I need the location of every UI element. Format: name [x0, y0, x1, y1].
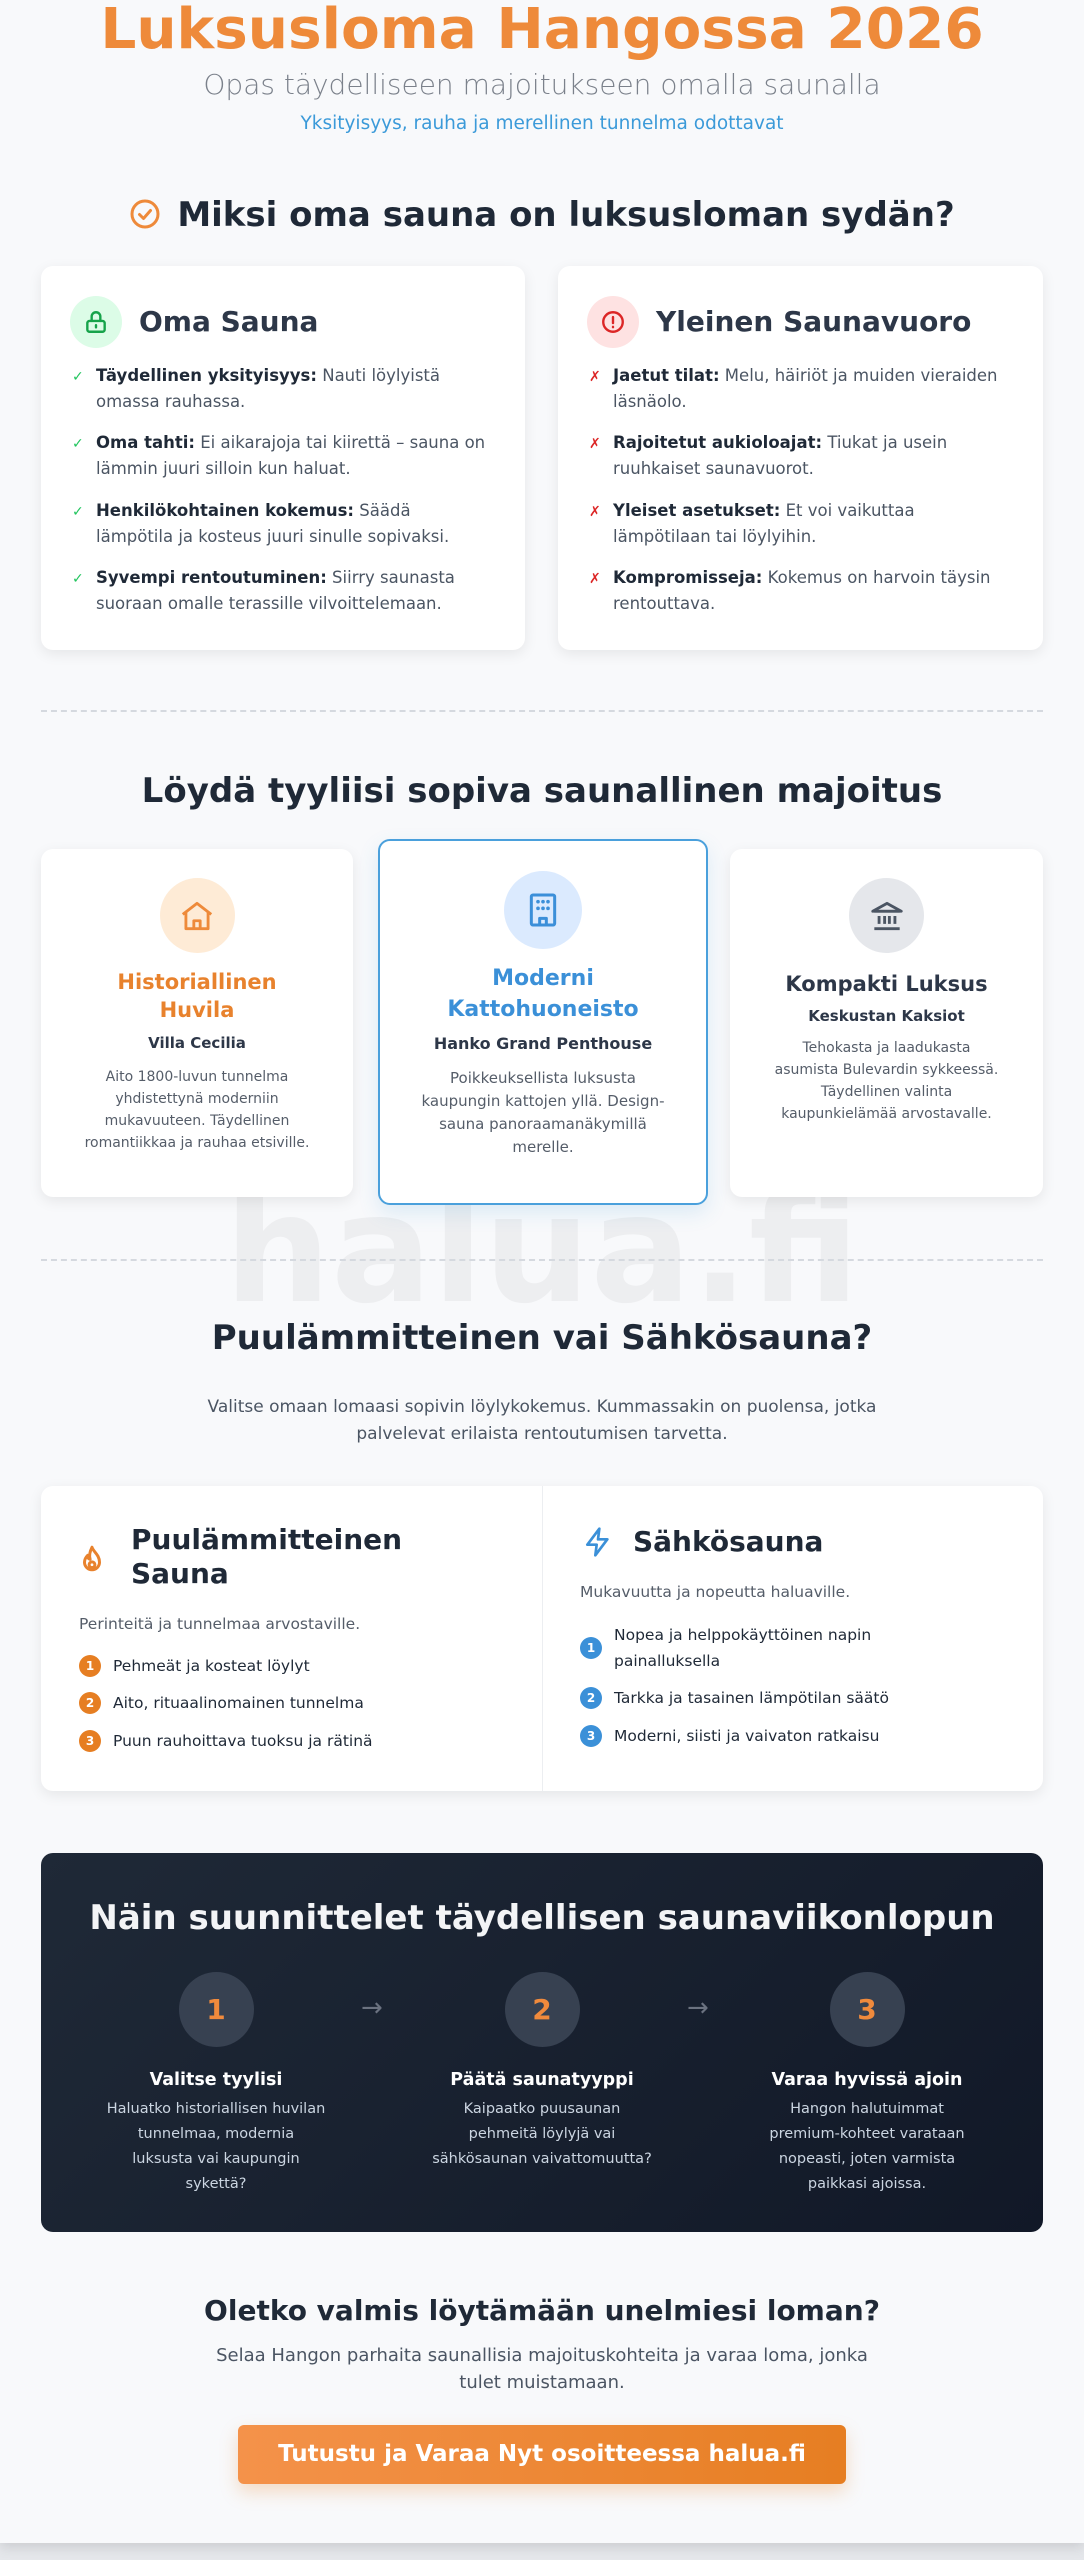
- column: wood sauna: Puun rauhoittava tuoksu ja rätinä: [113, 1732, 373, 1750]
- card text: Villa Cecilia: [148, 1034, 246, 1052]
- item list: Kompromisseja: Kokemus on harvoin täysin: [613, 568, 990, 587]
- item list: ruuhkaiset saunavuorot.: [613, 459, 814, 478]
- step 1: [107, 1972, 325, 2192]
- item list: Yleiset asetukset: Et voi vaikuttaa: [613, 501, 915, 520]
- step 1: 1: [206, 1993, 226, 2026]
- card text: mukavuuteen. Täydellinen: [105, 1113, 289, 1129]
- step 3: 3: [857, 1993, 877, 2026]
- CTA button: Tutustu ja Varaa Nyt osoitteessa halua.fi: [278, 2441, 806, 2467]
- icon: lightning: [586, 1527, 609, 1557]
- arrow: →: [361, 1993, 383, 2023]
- item list: [589, 366, 998, 613]
- column: electric sauna: Sähkösauna: [633, 1525, 823, 1558]
- card text: yhdistettynä moderniin: [115, 1091, 279, 1107]
- step 3: Hangon halutuimmat: [790, 2101, 944, 2117]
- icon: house: [160, 878, 234, 953]
- card text: Keskustan Kaksiot: [808, 1007, 965, 1025]
- step 2: 2: [532, 1993, 552, 2026]
- column: electric sauna: Nopea ja helppokäyttöinen napin: [614, 1626, 871, 1644]
- item list: lämpötila ja kosteus juuri sinulle sopivaksi.: [96, 527, 449, 546]
- item list: lämpötilaan tai löylyihin.: [613, 527, 816, 546]
- arrow: →: [687, 1993, 709, 2023]
- tagline: Yksityisyys, rauha ja merellinen tunnelma odottavat: [300, 113, 784, 134]
- card text: kaupungin kattojen yllä. Design-: [422, 1092, 664, 1110]
- panel heading: Oma Sauna: [139, 305, 318, 338]
- panel: yleinen saunavuoro: [558, 266, 1043, 650]
- panel: comparison: [41, 1486, 1043, 1791]
- item list: Syvempi rentoutuminen: Siirry saunasta: [96, 568, 455, 587]
- step 1: Haluatko historiallisen huvilan: [107, 2101, 325, 2117]
- item list: ✗: [589, 571, 601, 587]
- card text: romantiikkaa ja rauhaa etsiville.: [85, 1135, 309, 1151]
- item list: Jaetut tilat: Melu, häiriöt ja muiden vieraiden: [613, 366, 998, 385]
- card text: [85, 970, 309, 1151]
- card text: Aito 1800-luvun tunnelma: [106, 1069, 288, 1085]
- card text: Hanko Grand Penthouse: [434, 1034, 652, 1053]
- column: electric sauna: Tarkka ja tasainen lämpötilan säätö: [614, 1689, 889, 1707]
- card text: Huvila: [160, 998, 234, 1022]
- intro text: palvelevat erilaista rentoutumisen tarvetta.: [356, 1424, 728, 1444]
- step 2: sähkösaunan vaivattomuutta?: [432, 2151, 652, 2167]
- item list: Oma tahti: Ei aikarajoja tai kiirettä – sauna on: [96, 433, 485, 452]
- step 2: Kaipaatko puusaunan: [464, 2101, 620, 2117]
- item list: ✓: [72, 504, 84, 520]
- item list: ✓: [72, 369, 84, 385]
- item list: ✗: [589, 369, 601, 385]
- intro text: Valitse omaan lomaasi sopivin löylykokemus. Kummassakin on puolensa, jotka: [208, 1397, 876, 1417]
- column: wood sauna: Puulämmitteinen: [131, 1523, 402, 1556]
- card text: merelle.: [512, 1138, 574, 1156]
- step 2: [432, 1972, 652, 2167]
- card text: asumista Bulevardin sykkeessä.: [775, 1062, 998, 1078]
- step 3: paikkasi ajoissa.: [808, 2176, 926, 2192]
- subtitle: Opas täydelliseen majoitukseen omalla saunalla: [203, 68, 881, 101]
- column: wood sauna: Sauna: [131, 1557, 229, 1590]
- card text: [422, 966, 664, 1156]
- heading: why own sauna: Miksi oma sauna on luksusloman sydän?: [177, 195, 955, 235]
- step 3: premium-kohteet varataan: [769, 2126, 965, 2142]
- item list: ✗: [589, 504, 601, 520]
- step 3: Varaa hyvissä ajoin: [771, 2070, 963, 2090]
- CTA text: Selaa Hangon parhaita saunallisia majoituskohteita ja varaa loma, jonka: [216, 2345, 868, 2366]
- column: electric sauna: [580, 1525, 889, 1747]
- column: electric sauna: 2: [587, 1691, 595, 1705]
- item list: Täydellinen yksityisyys: Nauti löylyistä: [96, 366, 440, 385]
- CTA heading: Oletko valmis löytämään unelmiesi loman?: [204, 2294, 880, 2327]
- item list: ✓: [72, 436, 84, 452]
- watermark: halua.fi: [224, 1163, 860, 1337]
- column: wood sauna: Pehmeät ja kosteat löylyt: [113, 1657, 310, 1675]
- card text: Kompakti Luksus: [785, 972, 988, 996]
- column: electric sauna: 1: [587, 1641, 595, 1655]
- column: electric sauna: painalluksella: [614, 1652, 720, 1670]
- item list: läsnäolo.: [613, 392, 687, 411]
- column: electric sauna: 3: [587, 1729, 595, 1743]
- card text: Kattohuoneisto: [447, 997, 639, 1022]
- step 1: luksusta vai kaupungin: [132, 2151, 300, 2167]
- CTA text: tulet muistamaan.: [459, 2372, 625, 2393]
- icon: flame: [83, 1546, 101, 1572]
- item list: Rajoitetut aukioloajat: Tiukat ja usein: [613, 433, 947, 452]
- icon: alert: [587, 296, 639, 348]
- CTA button: [238, 2425, 846, 2484]
- item list: ✓: [72, 571, 84, 587]
- column: wood sauna: 3: [86, 1734, 94, 1748]
- column: wood sauna: 2: [86, 1696, 94, 1710]
- card text: Poikkeuksellista luksusta: [450, 1069, 636, 1087]
- item list: lämmin juuri silloin kun haluat.: [96, 459, 351, 478]
- card text: kaupunkielämää arvostavalle.: [781, 1106, 992, 1122]
- step 1: sykettä?: [186, 2176, 246, 2192]
- item list: ✗: [589, 436, 601, 452]
- card text: Historiallinen: [117, 970, 277, 994]
- card: moderni kattohuoneisto: [378, 839, 708, 1205]
- step 3: nopeasti, joten varmista: [779, 2151, 955, 2167]
- step 2: pehmeitä löylyjä vai: [469, 2126, 615, 2142]
- step 2: Päätä saunatyyppi: [450, 2070, 634, 2090]
- panel: oma sauna: [41, 266, 525, 650]
- panel heading: Yleinen Saunavuoro: [656, 305, 971, 338]
- step 1: Valitse tyylisi: [150, 2070, 282, 2090]
- column: wood sauna: Aito, rituaalinomainen tunnelma: [113, 1694, 364, 1712]
- intro text: [208, 1397, 876, 1444]
- card: kompakti luksus: [730, 849, 1043, 1197]
- column: wood sauna: Perinteitä ja tunnelmaa arvostaville.: [79, 1615, 360, 1633]
- icon: lock: [70, 296, 122, 348]
- item list: omassa rauhassa.: [96, 392, 245, 411]
- item list: rentouttava.: [613, 594, 715, 613]
- step 3: [769, 1972, 965, 2192]
- step 1: tunnelmaa, modernia: [138, 2126, 294, 2142]
- item list: Henkilökohtainen kokemus: Säädä: [96, 501, 411, 520]
- CTA text: [216, 2345, 868, 2393]
- card text: Tehokasta ja laadukasta: [802, 1040, 970, 1056]
- card text: [775, 972, 998, 1122]
- card: historiallinen huvila: [41, 849, 353, 1197]
- column: wood sauna: [79, 1523, 402, 1752]
- icon: building: [504, 871, 582, 949]
- card text: Moderni: [492, 966, 594, 991]
- item list: [72, 366, 485, 613]
- heading: Näin suunnittelet täydellisen saunaviikonlopun: [89, 1898, 995, 1938]
- item list: suoraan omalle terassille vilvoittelemaan.: [96, 594, 442, 613]
- heading: wood vs electric: Puulämmitteinen vai Sähkösauna?: [212, 1318, 872, 1358]
- column: electric sauna: Moderni, siisti ja vaivaton ratkaisu: [614, 1727, 879, 1745]
- card text: Täydellinen valinta: [821, 1084, 952, 1100]
- column: wood sauna: 1: [86, 1659, 94, 1673]
- card text: sauna panoraamanäkymillä: [439, 1115, 647, 1133]
- heading: find your style: Löydä tyyliisi sopiva saunallinen majoitus: [142, 771, 942, 811]
- column: electric sauna: Mukavuutta ja nopeutta haluaville.: [580, 1583, 850, 1601]
- panel: planning steps: [41, 1853, 1043, 2232]
- icon: bank building: [849, 878, 924, 953]
